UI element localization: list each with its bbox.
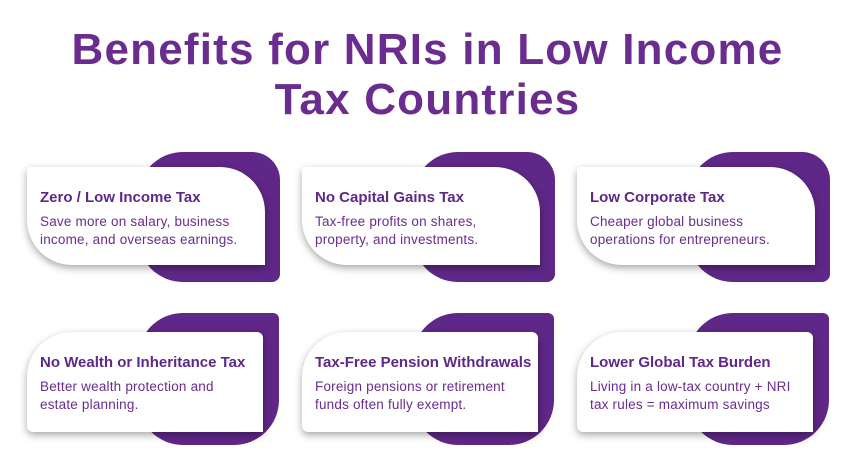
card: tax-free pension withdrawals xyxy=(297,313,554,445)
card: low corporate tax: operations for entrepreneurs. xyxy=(590,232,770,247)
card: no capital gains tax xyxy=(297,152,555,282)
card: no capital gains tax: No Capital Gains Tax xyxy=(315,189,464,206)
card: no wealth or inheritance tax xyxy=(22,313,279,445)
card: tax-free pension withdrawals: Foreign pensions or retirement xyxy=(315,379,505,394)
card: lower global tax burden xyxy=(572,313,829,445)
card: zero low income tax: Zero / Low Income Tax xyxy=(40,189,201,206)
card: lower global tax burden: tax rules = maximum savings xyxy=(590,397,770,412)
card: low corporate tax xyxy=(572,152,830,282)
card: no capital gains tax: property, and investments. xyxy=(315,232,478,247)
card: no wealth or inheritance tax: Better wealth protection and xyxy=(40,379,214,394)
card: zero low income tax: income, and overseas earnings. xyxy=(40,232,237,247)
card: low corporate tax: Low Corporate Tax xyxy=(590,189,725,206)
card: no wealth or inheritance tax: estate planning. xyxy=(40,397,139,412)
card: lower global tax burden: Lower Global Tax Burden xyxy=(590,354,771,371)
card: no wealth or inheritance tax: No Wealth or Inheritance Tax xyxy=(40,354,245,371)
card: zero low income tax: Save more on salary, business xyxy=(40,214,229,229)
card: low corporate tax: Cheaper global business xyxy=(590,214,743,229)
card: tax-free pension withdrawals: Tax-Free Pension Withdrawals xyxy=(315,354,531,371)
card: zero low income tax xyxy=(22,152,280,282)
title: Benefits for NRIs in Low Income xyxy=(72,25,783,74)
card: tax-free pension withdrawals: funds often fully exempt. xyxy=(315,397,466,412)
card: no capital gains tax: Tax-free profits on shares, xyxy=(315,214,476,229)
title: Tax Countries xyxy=(275,75,580,124)
card: lower global tax burden: Living in a low-tax country + NRI xyxy=(590,379,791,394)
title xyxy=(72,25,783,124)
